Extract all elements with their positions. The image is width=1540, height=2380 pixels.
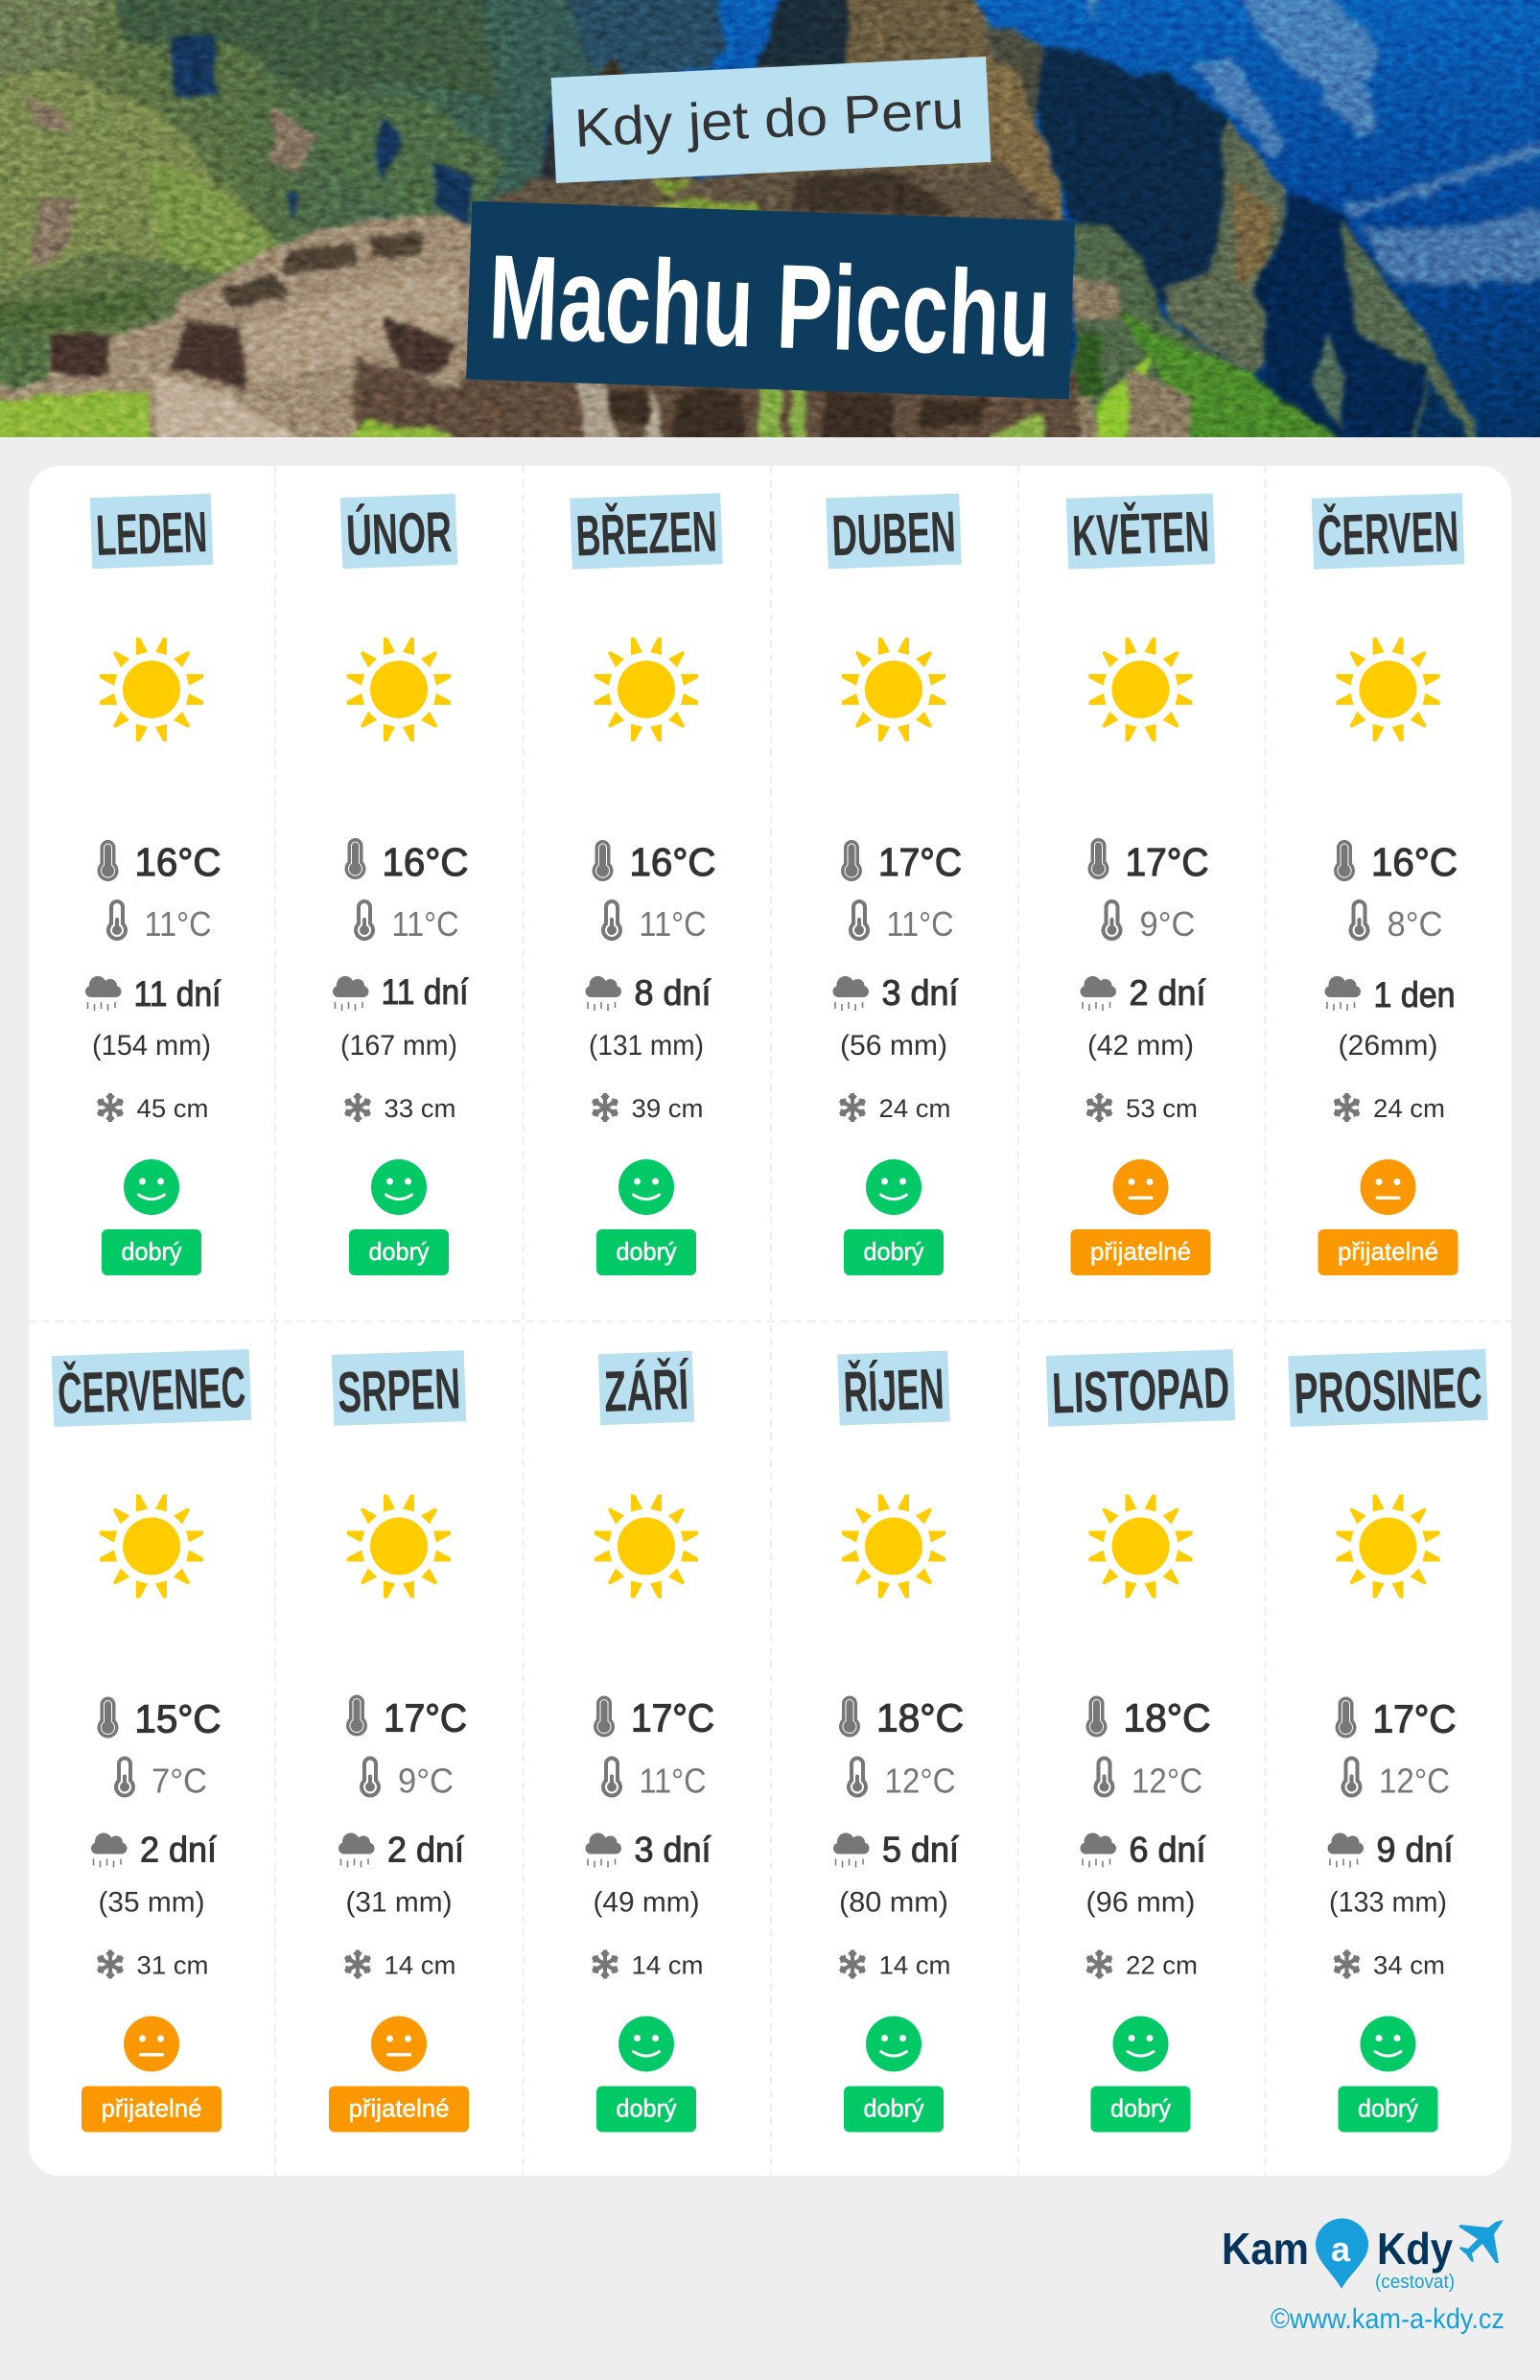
icon: good face — [124, 1159, 179, 1215]
rating badge — [844, 2087, 944, 2133]
max temperature: 18°C — [1124, 1695, 1210, 1739]
month tag — [90, 494, 213, 569]
icon: neutral face — [124, 2016, 179, 2071]
snow depth: 53 cm — [1126, 1094, 1198, 1123]
heading: Machu Picchu — [466, 201, 1075, 399]
rating badge: dobrý — [863, 2094, 924, 2123]
rain days: 3 dní — [635, 1830, 712, 1870]
icon: location pin — [1316, 2219, 1368, 2289]
month: ŘÍJEN — [833, 1351, 964, 2133]
rating badge — [329, 2087, 469, 2133]
rating badge — [349, 1229, 449, 1275]
max temperature: 17°C — [1126, 840, 1208, 884]
icon: sun — [1089, 1494, 1193, 1598]
month tag: LISTOPAD — [1051, 1355, 1230, 1426]
snow depth — [343, 1950, 456, 1979]
rain days: 8 dní — [635, 973, 712, 1013]
icon: sun — [347, 1494, 451, 1598]
min temperature — [354, 899, 458, 944]
min temperature — [601, 899, 706, 944]
snow depth — [96, 1093, 209, 1123]
month tag — [826, 494, 962, 569]
snow depth — [343, 1093, 456, 1123]
rain days: 2 dní — [1130, 973, 1206, 1013]
rain days — [338, 1830, 465, 1870]
rating badge — [1091, 2087, 1191, 2133]
max temperature — [98, 840, 221, 884]
max temperature — [1085, 1695, 1210, 1739]
rating badge: dobrý — [1358, 2094, 1418, 2123]
rain days — [1080, 973, 1206, 1013]
min temperature — [1101, 899, 1195, 944]
max temperature: 17°C — [1373, 1697, 1456, 1741]
snow depth — [591, 1093, 704, 1123]
precipitation: (133 mm) — [1329, 1887, 1447, 1918]
rain days — [1327, 1830, 1454, 1870]
rating badge — [596, 2087, 696, 2133]
max temperature: 17°C — [631, 1695, 714, 1739]
snow depth: 14 cm — [384, 1950, 456, 1979]
icon: good face — [1360, 2016, 1415, 2071]
rain days: 2 dní — [140, 1830, 218, 1870]
rating badge — [102, 1229, 201, 1275]
precipitation: (31 mm) — [345, 1887, 453, 1918]
precipitation: (154 mm) — [92, 1030, 211, 1062]
month tag: LEDEN — [95, 500, 208, 568]
month: LEDEN — [85, 494, 222, 1275]
icon: sun — [100, 1494, 203, 1598]
max temperature — [593, 840, 715, 884]
rating badge — [1339, 2087, 1438, 2133]
precipitation: (49 mm) — [593, 1887, 700, 1918]
min temperature — [114, 1757, 207, 1801]
month: SRPEN — [329, 1350, 469, 2133]
icon: neutral face — [1360, 1159, 1415, 1215]
max temperature: 15°C — [134, 1697, 221, 1741]
snow depth: 45 cm — [136, 1094, 209, 1123]
panel: white climate table — [29, 466, 1511, 2176]
snow depth: 39 cm — [631, 1094, 704, 1123]
month: KVĚTEN — [1066, 493, 1215, 1275]
min temperature: 11°C — [639, 1761, 706, 1801]
rain days: 3 dní — [882, 973, 959, 1013]
rain days: 2 dní — [387, 1830, 465, 1870]
icon: sun — [842, 638, 945, 741]
max temperature — [1334, 840, 1458, 884]
max temperature: 17°C — [384, 1695, 467, 1739]
logo: Kam a Kdy: Kdy — [1377, 2224, 1453, 2274]
icon: sun — [1337, 638, 1440, 741]
snow depth: 14 cm — [631, 1950, 704, 1979]
photo: Machu Picchu mountain scene — [0, 0, 1540, 460]
icon: good face — [618, 1159, 674, 1215]
month tag: BŘEZEN — [574, 499, 718, 569]
min temperature — [1341, 1757, 1450, 1801]
rain days: 11 dní — [134, 974, 222, 1014]
snow depth — [838, 1950, 951, 1979]
month tag: ZÁŘÍ — [603, 1357, 690, 1424]
month tag — [1046, 1349, 1235, 1427]
logo: Kam a Kdy: Kam — [1222, 2224, 1309, 2274]
icon: sun — [100, 638, 203, 741]
max temperature: 17°C — [878, 840, 962, 884]
snow depth: 31 cm — [136, 1950, 209, 1979]
month tag: ČERVENEC — [57, 1355, 246, 1426]
icon: good face — [866, 2016, 922, 2071]
snow depth: 34 cm — [1373, 1950, 1445, 1979]
min temperature: 11°C — [639, 904, 706, 944]
snow depth: 24 cm — [1373, 1094, 1445, 1123]
max temperature — [98, 1697, 221, 1741]
rating badge — [596, 1229, 696, 1275]
precipitation: (56 mm) — [840, 1030, 947, 1062]
icon: sun — [347, 638, 451, 741]
month: PROSINEC — [1288, 1349, 1488, 2133]
max temperature — [594, 1695, 714, 1739]
month: BŘEZEN — [570, 493, 723, 1275]
max temperature: 16°C — [629, 840, 715, 884]
month: ČERVENEC — [52, 1349, 251, 2133]
icon: sun — [1089, 638, 1193, 741]
snow depth — [838, 1093, 951, 1123]
rain days: 1 den — [1373, 975, 1456, 1015]
min temperature — [360, 1757, 454, 1801]
snow depth — [1333, 1950, 1445, 1979]
snow depth — [96, 1950, 209, 1979]
month: DUBEN — [826, 494, 962, 1275]
logo: Kam a Kdy — [1222, 2219, 1504, 2293]
min temperature: 12°C — [1379, 1761, 1450, 1801]
month tag: KVĚTEN — [1071, 500, 1210, 568]
icon: good face — [866, 1159, 922, 1215]
min temperature: 11°C — [886, 904, 953, 944]
snow depth — [1333, 1093, 1445, 1123]
max temperature — [841, 840, 962, 884]
min temperature: 12°C — [1132, 1761, 1202, 1801]
month tag: ŘÍJEN — [842, 1357, 945, 1424]
rating badge: dobrý — [616, 2094, 677, 2123]
min temperature: 11°C — [144, 904, 211, 944]
rain days: 5 dní — [882, 1830, 960, 1870]
icon: sun — [595, 1494, 698, 1598]
min temperature — [1348, 899, 1442, 944]
rating badge — [82, 2087, 222, 2133]
rain days — [585, 973, 712, 1013]
max temperature: 16°C — [1371, 840, 1458, 884]
rain days — [585, 1830, 712, 1870]
snow depth: 33 cm — [384, 1094, 456, 1123]
min temperature — [1093, 1757, 1202, 1801]
month: ZÁŘÍ — [585, 1351, 714, 2133]
snow depth — [1085, 1950, 1198, 1979]
icon: location pin: a — [1331, 2229, 1351, 2269]
max temperature — [346, 1695, 467, 1739]
month tag — [837, 1351, 950, 1425]
rating badge: dobrý — [863, 1237, 924, 1266]
icon: airplane — [1458, 2220, 1504, 2263]
snow depth: 22 cm — [1126, 1950, 1198, 1979]
snow depth — [1085, 1093, 1198, 1123]
rating badge: dobrý — [1110, 2094, 1171, 2123]
month tag: SRPEN — [337, 1356, 461, 1425]
rain days: 6 dní — [1130, 1830, 1206, 1870]
rating badge: přijatelné — [349, 2094, 449, 2123]
month tag — [332, 1350, 466, 1426]
rain days — [1325, 975, 1456, 1015]
min temperature: 7°C — [152, 1761, 207, 1801]
min temperature: 9°C — [1139, 904, 1195, 944]
max temperature — [1087, 838, 1208, 884]
min temperature — [847, 1757, 955, 1801]
month tag — [598, 1351, 694, 1425]
month tag — [570, 493, 723, 570]
snow depth: 24 cm — [878, 1094, 951, 1123]
rating badge: dobrý — [121, 1237, 182, 1266]
max temperature — [1335, 1697, 1456, 1741]
icon: sun — [842, 1494, 945, 1598]
max temperature: 16°C — [134, 840, 221, 884]
max temperature — [839, 1695, 964, 1739]
precipitation: (35 mm) — [98, 1887, 205, 1918]
month: ÚNOR — [333, 494, 469, 1275]
icon: sun — [595, 638, 698, 741]
rating badge: přijatelné — [1338, 1237, 1438, 1266]
min temperature: 11°C — [391, 904, 458, 944]
max temperature: 18°C — [876, 1695, 964, 1739]
rating badge: přijatelné — [1090, 1237, 1191, 1266]
month tag — [1312, 493, 1464, 570]
icon: good face — [618, 2016, 674, 2071]
snow depth — [591, 1950, 704, 1979]
min temperature — [601, 1757, 706, 1801]
precipitation: (131 mm) — [589, 1030, 704, 1062]
month: LISTOPAD — [1046, 1349, 1235, 2133]
rain days — [333, 972, 469, 1012]
icon: sun — [1337, 1494, 1440, 1598]
rating badge — [1070, 1229, 1210, 1275]
max temperature — [345, 838, 468, 884]
rating badge: dobrý — [616, 1237, 677, 1266]
icon: good face — [371, 1159, 427, 1215]
icon: neutral face — [1112, 1159, 1168, 1215]
rain days — [91, 1830, 218, 1870]
month tag: ÚNOR — [345, 500, 453, 568]
max temperature: 16°C — [382, 840, 468, 884]
precipitation: (167 mm) — [340, 1030, 457, 1062]
min temperature: 8°C — [1387, 904, 1442, 944]
rain days: 11 dní — [382, 972, 469, 1012]
icon: good face — [1112, 2016, 1168, 2071]
min temperature — [849, 899, 953, 944]
logo: Kam a Kdy: (cestovat) — [1375, 2272, 1455, 2293]
rain days — [833, 1830, 960, 1870]
precipitation: (26mm) — [1339, 1030, 1438, 1062]
min temperature: 12°C — [884, 1761, 955, 1801]
heading: Kdy jet do Peru — [551, 57, 991, 183]
rating badge: přijatelné — [102, 2094, 201, 2123]
precipitation: (80 mm) — [839, 1887, 948, 1918]
rating badge: dobrý — [368, 1237, 430, 1266]
rain days: 9 dní — [1377, 1830, 1454, 1870]
icon: neutral face — [371, 2016, 427, 2071]
rain days — [85, 974, 222, 1014]
precipitation: (42 mm) — [1087, 1030, 1194, 1062]
heading: Machu Picchu: Machu Picchu — [487, 230, 1053, 383]
min temperature — [106, 899, 211, 944]
heading: Kdy jet do Peru: Kdy jet do Peru — [573, 79, 965, 158]
rating badge — [1318, 1229, 1458, 1275]
month tag: DUBEN — [830, 500, 957, 568]
precipitation: (96 mm) — [1085, 1887, 1195, 1918]
month tag — [1066, 493, 1215, 570]
rain days — [1080, 1830, 1206, 1870]
min temperature: 9°C — [398, 1761, 454, 1801]
month tag — [52, 1349, 251, 1427]
rating badge — [844, 1229, 944, 1275]
month tag — [340, 494, 457, 569]
website url: ©www.kam-a-kdy.cz — [1271, 2303, 1505, 2335]
month: ČERVEN — [1312, 493, 1464, 1275]
snow depth: 14 cm — [878, 1950, 951, 1979]
rain days — [832, 973, 959, 1013]
